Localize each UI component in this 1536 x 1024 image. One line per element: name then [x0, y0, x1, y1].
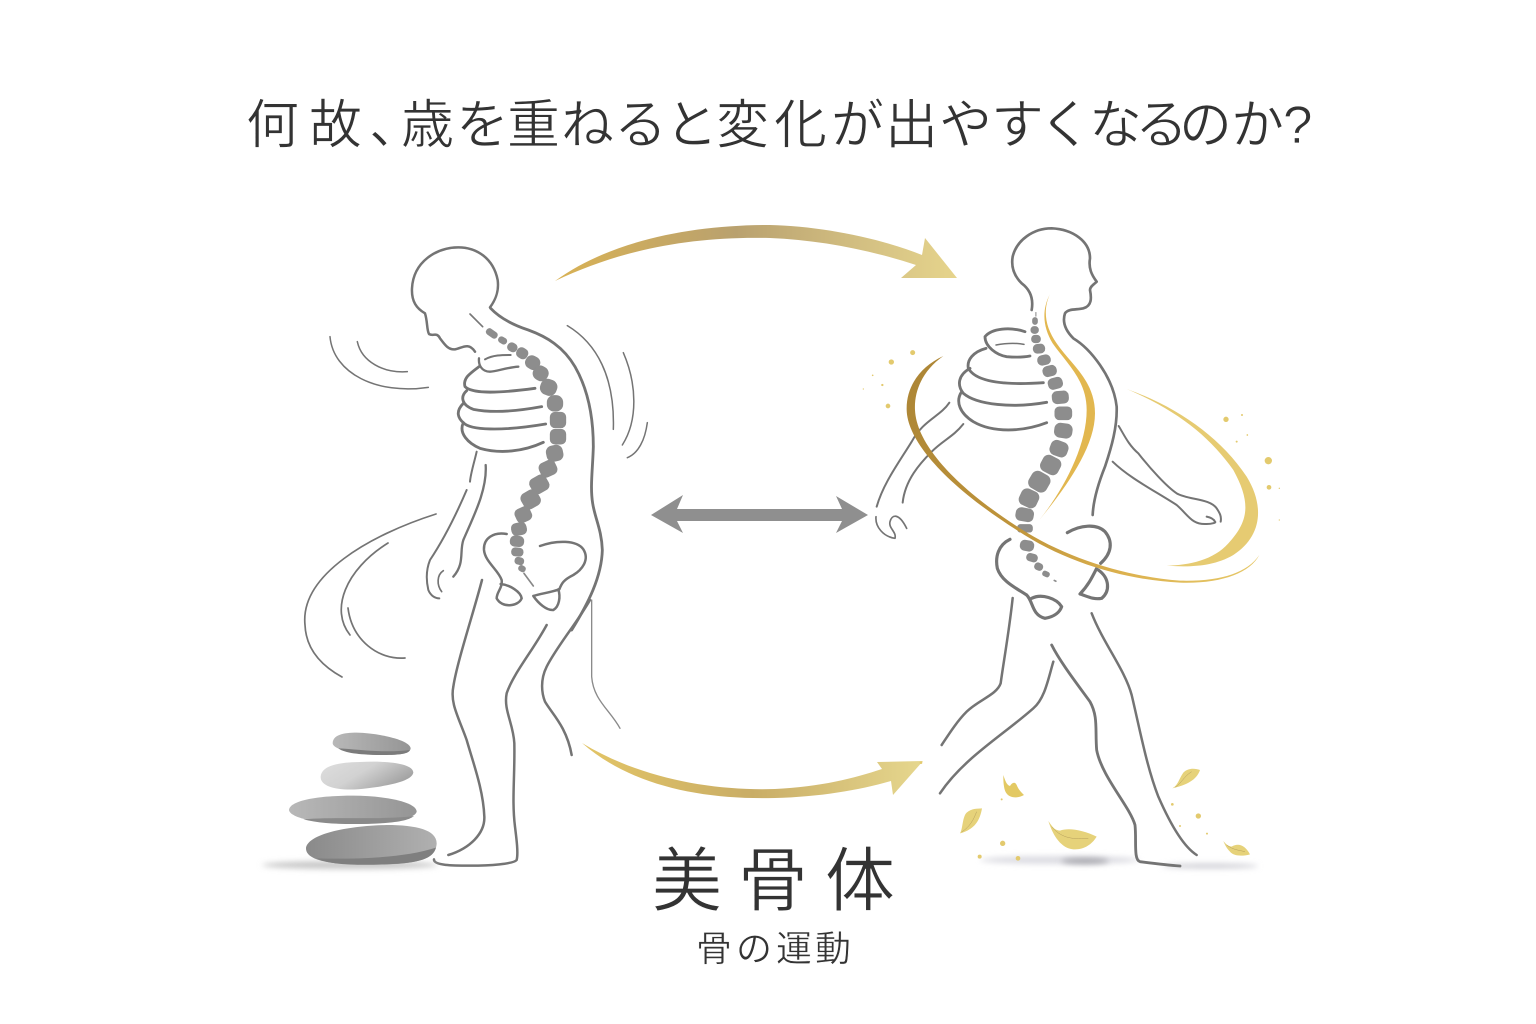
body outline legs [434, 580, 620, 866]
body outline upper [412, 247, 602, 630]
title: 何故、歳を重ねると変化が出やすくなるのか? [246, 96, 1312, 155]
body outline upper [876, 228, 1221, 538]
spine [470, 314, 566, 586]
leaf 2 [960, 808, 982, 833]
ribs [458, 355, 546, 451]
arrow: top gold arrow [555, 225, 957, 281]
leaf veins [962, 772, 1245, 852]
subtitle: 骨の運動 [696, 928, 851, 969]
arrow: bottom gold arrow [582, 743, 923, 798]
stone 4 [306, 825, 437, 865]
leaves [920, 761, 1250, 861]
arrow: gray double arrow [651, 495, 868, 533]
shadow under stones [262, 861, 438, 869]
ground shadow: walking figure [980, 856, 1258, 868]
pelvis [484, 534, 586, 610]
ribs [959, 329, 1047, 430]
leaf 4 [1172, 769, 1200, 788]
figure: stooped person [305, 247, 647, 866]
leaf 3 [1048, 821, 1097, 849]
spine [1015, 312, 1073, 582]
leaf 1 [1003, 775, 1024, 797]
body outline legs [940, 598, 1197, 866]
stone 1 [333, 733, 411, 755]
gold particles around ring [863, 350, 1280, 521]
brand name: 美骨体 [652, 842, 895, 920]
gold particles near feet [920, 761, 1208, 861]
motion lines [330, 326, 647, 458]
pelvis [997, 526, 1110, 618]
figure: walking person [863, 228, 1280, 866]
motion sweeps [305, 514, 436, 677]
leaf 5 [1223, 841, 1250, 856]
stones [289, 733, 437, 865]
stone 2 [321, 762, 413, 790]
ring back arc [1127, 389, 1258, 566]
ring front arc [907, 356, 1259, 583]
gold spine line [1039, 294, 1095, 520]
stone 3 [289, 796, 417, 824]
